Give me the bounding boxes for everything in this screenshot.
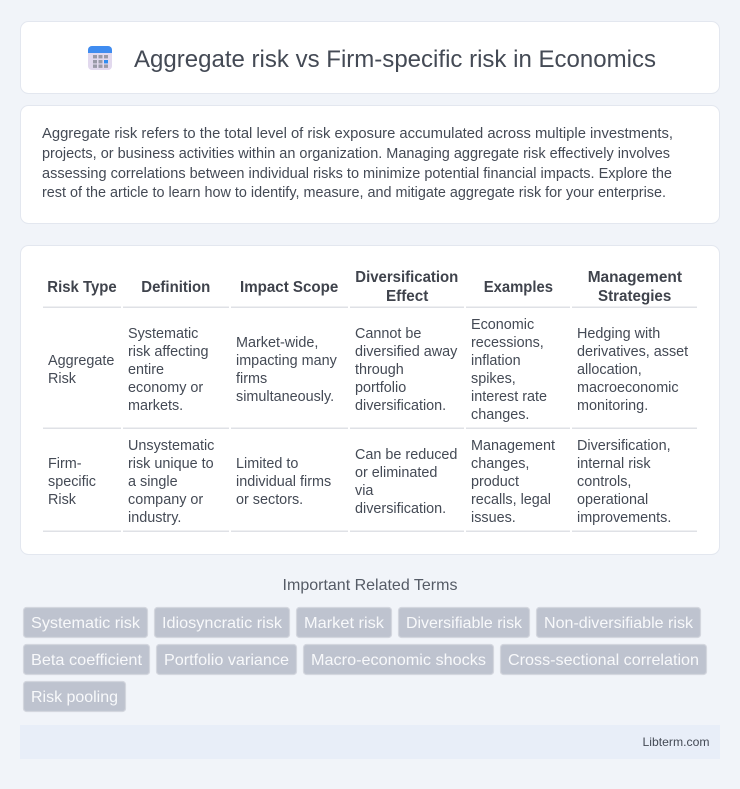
footer: Libterm.com (642, 735, 710, 749)
table row: firm-specific risk: risk unique to (128, 456, 214, 472)
table row: aggregate risk: portfolio (355, 380, 406, 396)
text block: introduction (42, 126, 673, 201)
panel: comparison table (20, 246, 720, 554)
table row: aggregate risk: spikes, (471, 371, 516, 387)
table row: aggregate risk: derivatives, asset (577, 344, 688, 360)
footer (20, 725, 720, 759)
text block: introduction: rest of the article to learn how to identify, measure, and mitigate aggregate risk for your enterprise. (42, 185, 666, 201)
table row: aggregate risk: recessions, (471, 335, 544, 351)
table row: firm-specific risk: individual firms (236, 474, 331, 490)
table row: firm-specific risk: or sectors. (236, 492, 303, 508)
table row: aggregate risk: risk affecting (128, 344, 209, 360)
table row: aggregate risk: diversification. (355, 398, 446, 414)
text block: introduction: assessing correlations between individual risks to minimize potential financial impacts. Explore the (42, 166, 672, 182)
table row: firm-specific risk: product (471, 474, 519, 490)
table header (47, 269, 683, 305)
table row: aggregate risk: markets. (128, 398, 183, 414)
table row: aggregate risk: Cannot be (355, 326, 421, 342)
related terms chips: Diversifiable risk (406, 615, 523, 632)
related terms chips (24, 608, 706, 712)
table row: firm-specific risk: Diversification, (577, 438, 671, 454)
table header: Effect (386, 288, 429, 305)
table row: aggregate risk: economy or (128, 380, 203, 396)
table row: firm-specific risk: diversification. (355, 501, 446, 517)
table header: Risk Type (47, 279, 117, 296)
table header: Impact Scope (240, 279, 338, 296)
table header: Definition (141, 279, 210, 296)
table row: aggregate risk: allocation, (577, 362, 642, 378)
related terms chips: Risk pooling (31, 689, 118, 706)
table row: aggregate risk: Market-wide, (236, 335, 318, 351)
table row: aggregate risk: firms (236, 371, 267, 387)
related terms chips: Non-diversifiable risk (544, 615, 694, 632)
table row: firm-specific risk: a single (128, 474, 178, 490)
table row: aggregate risk: macroeconomic (577, 380, 679, 396)
table row: aggregate risk: inflation (471, 353, 521, 369)
table row: aggregate risk: simultaneously. (236, 389, 334, 405)
table row: firm-specific risk: operational (577, 492, 648, 508)
table row: firm-specific risk: controls, (577, 474, 631, 490)
text block: introduction: projects, or business activities within an organization. Managing aggregate risk effectively involves (42, 146, 670, 162)
icon: calendar (88, 46, 112, 70)
table row: firm-specific risk: issues. (471, 510, 516, 526)
table row: firm-specific risk: Unsystematic (128, 438, 214, 454)
related terms chips: Idiosyncratic risk (162, 615, 283, 632)
table row: firm-specific risk: via (355, 483, 373, 499)
table row: firm-specific risk: Limited to (236, 456, 298, 472)
title: Aggregate risk vs Firm-specific risk in Economics (134, 46, 656, 73)
table row: firm-specific risk: Risk (48, 492, 77, 508)
table row: firm-specific risk: Management (471, 438, 555, 454)
table row: firm-specific risk: company or (128, 492, 203, 508)
related terms chips: Market risk (304, 615, 385, 632)
table row: firm-specific risk: recalls, legal (471, 492, 551, 508)
table row: aggregate risk: interest rate (471, 389, 547, 405)
table row: aggregate risk: diversified away (355, 344, 458, 360)
table row: firm-specific risk (48, 438, 671, 526)
table row: firm-specific risk: industry. (128, 510, 181, 526)
table header: Strategies (598, 288, 671, 305)
table row: firm-specific risk: or eliminated (355, 465, 437, 481)
table row: aggregate risk: Hedging with (577, 326, 660, 342)
text block: introduction: Aggregate risk refers to the total level of risk exposure accumulated across multiple investments, (42, 126, 673, 142)
table row: aggregate risk: monitoring. (577, 398, 648, 414)
table row: aggregate risk: impacting many (236, 353, 338, 369)
related terms chips: Systematic risk (31, 615, 141, 632)
table header: Examples (484, 279, 553, 296)
table row: aggregate risk: Risk (48, 371, 77, 387)
table row: aggregate risk: changes. (471, 407, 529, 423)
table row: firm-specific risk: internal risk (577, 456, 651, 472)
related terms chips: Macro-economic shocks (311, 652, 486, 669)
table row: aggregate risk: entire (128, 362, 164, 378)
table row: firm-specific risk: Can be reduced (355, 447, 457, 463)
table row: aggregate risk: Aggregate (48, 353, 114, 369)
table row: firm-specific risk: changes, (471, 456, 529, 472)
table row: aggregate risk: Economic (471, 317, 534, 333)
table row: firm-specific risk: improvements. (577, 510, 671, 526)
table row: aggregate risk: Systematic (128, 326, 198, 342)
table row: firm-specific risk: Firm- (48, 456, 82, 472)
table header: Diversification (355, 269, 458, 286)
related terms chips: Portfolio variance (164, 652, 289, 669)
related terms chips: Cross-sectional correlation (508, 652, 699, 669)
panel: title card (20, 22, 720, 94)
table row: firm-specific risk: specific (48, 474, 96, 490)
heading: related terms: Important Related Terms (283, 577, 457, 594)
table row: aggregate risk: through (355, 362, 404, 378)
related terms chips: Beta coefficient (31, 652, 143, 669)
panel: introduction (20, 106, 720, 224)
table header: Management (588, 269, 683, 286)
table row: aggregate risk (48, 317, 688, 423)
